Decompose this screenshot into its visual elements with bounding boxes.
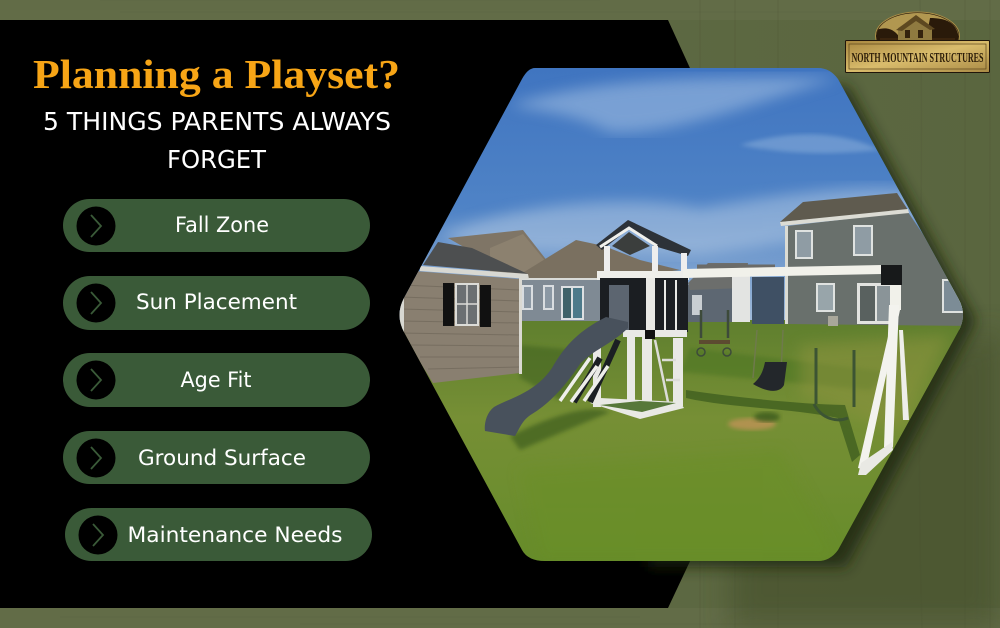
grey two-storey house (780, 193, 975, 326)
trapeze swing (697, 310, 731, 356)
grass (390, 320, 980, 565)
toddler bucket swing (753, 330, 787, 391)
item: Fall Zone: Fall Zone (175, 213, 269, 237)
storage shed (399, 242, 529, 383)
item: Age Fit: Age Fit (180, 368, 252, 392)
belt swing (814, 348, 854, 420)
item: Fall Zone (63, 199, 370, 252)
hexagon shadow (648, 86, 976, 567)
photo: playset in a backyard (390, 60, 980, 565)
item: Maintenance Needs (65, 508, 372, 561)
swing set frame (683, 265, 909, 475)
subtitle (43, 107, 391, 174)
title: Planning a Playset? (33, 51, 400, 97)
grey wave slide (485, 317, 628, 436)
item: Ground Surface (63, 431, 370, 484)
playset tower (560, 220, 691, 419)
item: Maintenance Needs: Maintenance Needs (128, 523, 342, 547)
item: Sun Placement (63, 276, 370, 330)
subtitle: 5 THINGS PARENTS ALWAYS (43, 107, 391, 136)
item: Ground Surface: Ground Surface (138, 446, 306, 470)
black content panel (0, 20, 700, 608)
item: Age Fit (63, 353, 370, 407)
distant house behind swing (688, 263, 784, 324)
grey back house (516, 240, 680, 321)
item: Sun Placement: Sun Placement (136, 290, 297, 314)
company logo (846, 12, 990, 72)
sky (390, 60, 980, 330)
subtitle: FORGET (167, 145, 267, 174)
tan back house (448, 230, 548, 275)
